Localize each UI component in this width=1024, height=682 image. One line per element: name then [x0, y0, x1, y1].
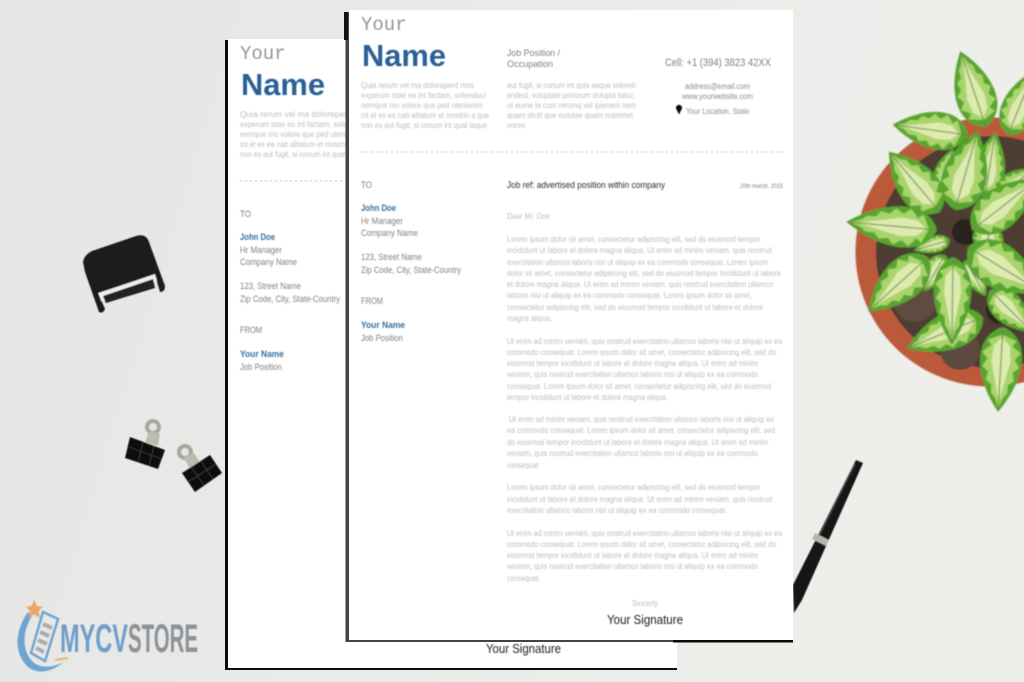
contact details: Your Location, State: [686, 106, 749, 116]
sheet shadow: [344, 12, 793, 642]
back letter sheet: [225, 39, 677, 670]
contact details: www.yourwebsite.com: [681, 92, 753, 101]
recipient block: Hr Manager: [240, 245, 282, 256]
letter paragraph one: laboris nisi ut aliquip ex ea commodo consequat. Lorem ipsum dolor sit amet,: [507, 291, 752, 300]
sender block: [240, 325, 284, 373]
intro paragraph middle: endest, voluptate poriorum dolupta tiatur,: [507, 91, 635, 100]
intro paragraph: nemque mo volore que ped utenienim: [240, 130, 362, 139]
your label: Your: [361, 14, 407, 36]
sheet shadow: [225, 40, 677, 670]
letter paragraph one: consectetur adipiscing elit, sed do eiusmod tempor incididunt ut labore et dolore: [507, 303, 763, 312]
intro paragraph: non es aut fugit, si conum int quat laque: [240, 150, 365, 159]
letter paragraph three: do eiusmod tempor incididunt ut labore et dolore magna aliqua. Ut enim ad minim: [507, 438, 768, 447]
sender block: FROM: [361, 296, 383, 307]
letter paragraph one: magna aliqua.: [507, 314, 552, 323]
recipient block: TO: [361, 180, 372, 191]
letter paragraph two: commodo consequat. Lorem ipsum dolor sit amet, consectetur adipiscing elit, sed do: [507, 348, 776, 357]
letter paragraph five: commodo consequat. Lorem ipsum dolor sit amet, consectetur adipiscing elit, sed do: [507, 540, 776, 549]
letter paragraph one: exercitation ullamco laboris nisi ut aliquip ex ea commodo consequat. Lorem ipsum: [507, 258, 768, 267]
intro paragraph middle: quam dictil que nusdae quam maximet: [507, 111, 634, 120]
letter paragraph two: eiusmod tempor incididunt ut labore et dolore magna aliqua. Ut enim ad minim: [507, 359, 758, 368]
recipient block: 123, Street Name: [240, 281, 301, 292]
intro paragraph left: int et es ea nab alitatum et mostrin a que: [361, 111, 489, 120]
letter paragraph three: consequat.: [507, 461, 540, 470]
letter paragraph five: Ut enim ad minim veniam, quis nostrud exercitation ullamco laboris nisi ut aliquip ex ea: [507, 529, 782, 538]
sender block: Job Position: [361, 333, 403, 344]
terracotta pot: [856, 118, 1024, 386]
sender block: Your Name: [240, 349, 284, 360]
sender block: FROM: [240, 325, 262, 336]
recipient block: [361, 180, 461, 276]
contact details: address@email.com: [685, 82, 750, 91]
letter paragraph four: [507, 483, 772, 515]
soil: [876, 136, 1024, 368]
icon: binder clip one: [125, 421, 165, 469]
letter paragraph four: exercitation ullamco laboris nisi ut aliquip ex ea commodo consequat.: [507, 506, 727, 515]
recipient block: Company Name: [240, 257, 297, 268]
your label: Your: [240, 43, 286, 65]
icon: location pin: [676, 105, 682, 114]
recipient block: Company Name: [361, 228, 418, 239]
intro paragraph middle: [507, 81, 636, 130]
job position: Job Position /: [507, 48, 560, 59]
letter paragraph five: eiusmod tempor incididunt ut labore et dolore magna aliqua. Ut enim ad minim: [507, 551, 758, 560]
letter paragraph two: Ut enim ad minim veniam, quis nostrud exercitation ullamco laboris nisi ut aliquip ex ea: [507, 337, 782, 346]
logo: MYCVSTORE: [18, 600, 198, 671]
job position: Occupation: [507, 59, 553, 70]
salutation: Dear Mr. Doe: [507, 211, 550, 221]
contact details: [665, 57, 772, 116]
recipient block: 123, Street Name: [361, 252, 422, 263]
sheet paper: [228, 39, 677, 668]
letter paragraph four: Lorem ipsum dolor sit amet, consectetur adipiscing elit, sed do eiusmod tempor: [507, 483, 760, 492]
recipient block: John Doe: [240, 232, 275, 243]
plant in terracotta pot: [845, 45, 1024, 413]
front letter sheet: [344, 10, 793, 642]
letter paragraph five: consequat.: [507, 574, 540, 583]
letter paragraph one: Lorem ipsum dolor sit amet, consectetur adipiscing elit, sed do eiusmod tempor: [507, 235, 760, 244]
letter paragraph one: [507, 235, 781, 323]
signature: Your Signature: [607, 612, 683, 627]
intro paragraph left: nemque mo volore que ped utenienim: [361, 101, 483, 110]
sender block: Job Position: [240, 362, 282, 373]
letter paragraph three: [507, 415, 775, 470]
intro paragraph left: Quia rerum vel ma doloreperd mos: [361, 81, 474, 90]
letter paragraph three: Ut enim ad minim veniam, quis nostrud exercitation ullamco laboris nisi ut aliquip ex: [509, 415, 774, 424]
intro paragraph middle: aut fugit, si conum int quis seque voloreh: [507, 81, 636, 90]
recipient block: TO: [240, 209, 251, 220]
letter paragraph five: [507, 529, 782, 583]
icon: black pen: [793, 460, 863, 613]
sender block: [361, 296, 405, 344]
recipient block: Hr Manager: [361, 216, 403, 227]
intro paragraph middle: ut eume la cum rerumq vel ipienam nem: [507, 101, 636, 110]
letter paragraph two: tempor incididunt ut labore et dolore magna aliqua.: [507, 393, 668, 402]
name heading: Name: [241, 67, 325, 102]
background leaves: [911, 129, 1024, 344]
logo wordmark: STORE: [128, 617, 198, 661]
name heading: Name: [362, 38, 446, 73]
letter paragraph one: incididunt ut labore et dolore magna aliqua. Ut enim ad minim veniam, quis nostrud: [507, 246, 772, 255]
recipient block: Zip Code, City, State-Country: [361, 265, 461, 276]
recipient block: [240, 209, 340, 305]
recipient block: John Doe: [361, 203, 396, 214]
letter paragraph three: veniam, quis nostrud exercitation ullamco laboris nisi ut aliquip ex ea commodo: [507, 449, 758, 458]
letter paragraph two: [507, 337, 782, 402]
logo icon: document with star and swoosh: [18, 600, 68, 671]
date: 20th march, 2015: [740, 184, 784, 190]
intro paragraph left: non es aut fugit, si conum int quat laque: [361, 121, 487, 130]
icon: binder clip two: [179, 446, 222, 492]
recipient block: Zip Code, City, State-Country: [240, 294, 340, 305]
letter paragraph two: consequat. Lorem ipsum dolor sit amet, consectetur adipiscing elit, sed do eiusmod: [507, 382, 771, 391]
icon: black tape dispenser: [83, 235, 165, 313]
job position: [507, 48, 560, 70]
sheet paper: [349, 10, 793, 640]
letter paragraph five: veniam, quis nostrud exercitation ullamco laboris nisi ut aliquip ex ea commodo: [507, 562, 758, 571]
intro paragraph left: [361, 81, 489, 130]
closing: Sincerly: [632, 599, 658, 608]
intro paragraph middle: vores: [507, 121, 525, 130]
back signature: Your Signature: [486, 642, 561, 656]
letter paragraph two: veniam, quis nostrud exercitation ullamco laboris nisi ut aliquip ex ea commodo: [507, 370, 758, 379]
job reference line: Job ref: advertised position within company: [507, 180, 665, 190]
contact details: Cell: +1 (394) 3823 42XX: [665, 57, 772, 69]
sender block: Your Name: [361, 320, 405, 331]
intro paragraph: int et es ea nab alitatum et mostrin a que: [240, 140, 368, 149]
letter paragraph one: dolor sit amet, consectetur adipiscing elit, sed do eiusmod tempor incididunt ut labore: [507, 269, 781, 278]
logo wordmark: MYCV: [60, 617, 128, 661]
intro paragraph left: experum stae es int factam, solenduci: [361, 91, 486, 100]
letter paragraph three: ea commodo consequat. Lorem ipsum dolor sit amet, consectetur adipiscing elit, sed: [507, 426, 775, 435]
letter paragraph four: incididunt ut labore et dolore magna aliqua. Ut enim ad minim veniam, quis nostrud: [507, 495, 772, 504]
intro paragraph: experum stae es int factam, solenduci: [240, 120, 365, 129]
letter paragraph one: et dolore magna aliqua. Ut enim ad minim veniam, quis nostrud exercitation ullamco: [507, 280, 773, 289]
intro paragraph: [240, 110, 370, 159]
intro paragraph: Quia rerum vel ma doloreperd mos: [240, 110, 370, 119]
foreground leaves: [845, 45, 1024, 413]
